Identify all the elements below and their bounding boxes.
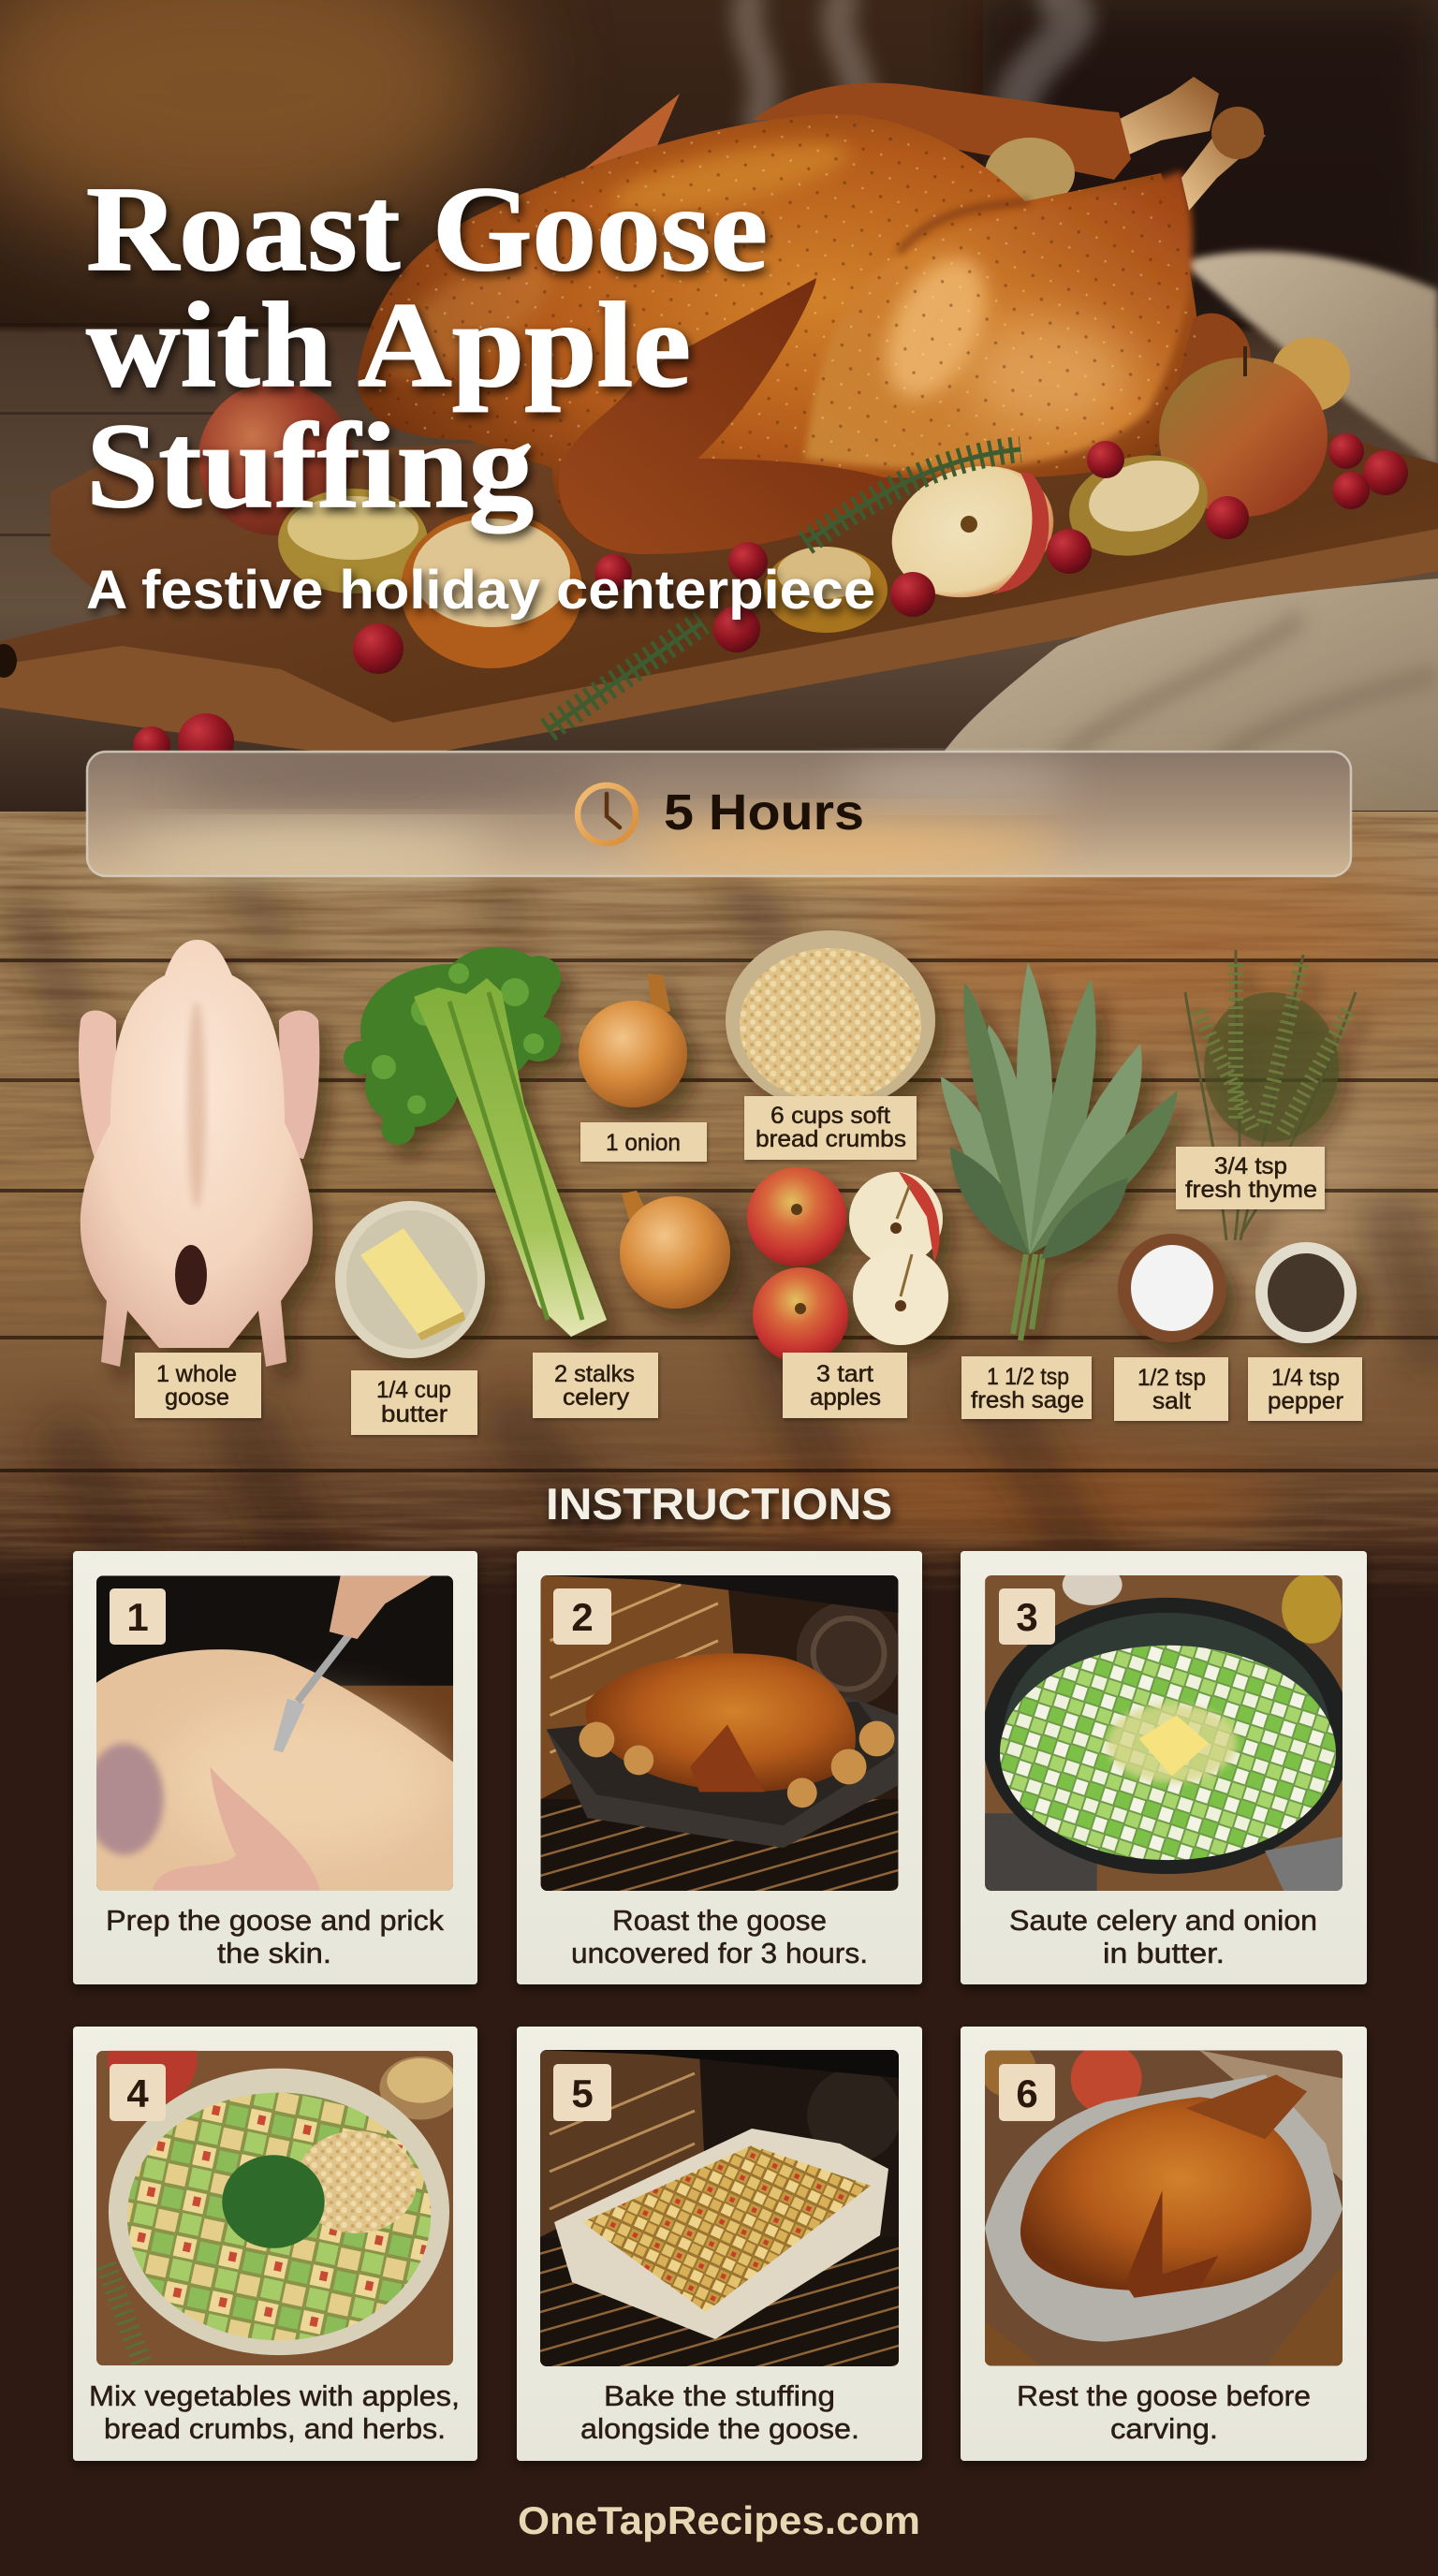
label: apples: [783, 1353, 907, 1418]
ingredient: onion bottom: [620, 1191, 730, 1309]
step 5 number: [553, 2064, 611, 2121]
ingredient: bread crumbs: [726, 930, 935, 1110]
ingredient: celery: [344, 947, 607, 1337]
title: Roast Goose: [86, 162, 768, 297]
goose back leg: [753, 77, 1219, 180]
label: sage: 1 1/2 tsp: [987, 1364, 1069, 1390]
step 1 card: [73, 1551, 477, 1984]
label: pepper: [1248, 1357, 1362, 1421]
step 2 text: [571, 1904, 868, 1969]
step 4 photo: [96, 2050, 453, 2366]
step 1 text: Prep the goose and prick: [106, 1904, 445, 1937]
title: with Apple: [86, 278, 691, 413]
step 2 number: 2: [571, 1595, 594, 1639]
label: celery: [533, 1353, 658, 1418]
background: dark lower section: [0, 1599, 1438, 2576]
cloth: upper right: [1181, 251, 1438, 468]
label: celery: 2 stalks: [554, 1361, 635, 1387]
label: onion: 1 onion: [606, 1130, 681, 1156]
step 3 text: in butter.: [1103, 1937, 1225, 1969]
ingredient: sage: [941, 962, 1178, 1340]
step 6 card: [961, 2027, 1367, 2461]
ingredient: pepper: [1255, 1242, 1357, 1343]
goose body: [356, 94, 1266, 562]
label: apples: 3 tart: [816, 1361, 873, 1387]
subtitle: A festive holiday centerpiece: [86, 560, 875, 621]
step 6 number: [999, 2064, 1055, 2121]
step 4 text: bread crumbs, and herbs.: [104, 2412, 446, 2445]
ingredient: salt: [1118, 1234, 1226, 1342]
step 1 text: the skin.: [217, 1937, 331, 1969]
rosemary sprigs: [548, 449, 1020, 730]
step 2 number: [553, 1588, 611, 1645]
step 4 text: [89, 2379, 460, 2445]
step 2 text: Roast the goose: [612, 1904, 827, 1937]
step 5 photo: [540, 2050, 899, 2366]
ingredient: onion top: [579, 973, 687, 1107]
step 2 text: uncovered for 3 hours.: [571, 1937, 868, 1969]
ingredient: butter: [335, 1201, 485, 1358]
label: salt: [1114, 1357, 1228, 1421]
step 1 text: [106, 1904, 445, 1969]
step 3 photo: [985, 1575, 1343, 1891]
goose wing: [559, 278, 899, 554]
steam: [747, 0, 1073, 122]
step 4 number: [110, 2064, 166, 2121]
background: hero scene: [0, 0, 1438, 814]
step 3 text: Saute celery and onion: [1009, 1904, 1317, 1937]
label: bread crumbs: [744, 1096, 917, 1160]
step 6 number: 6: [1016, 2071, 1038, 2115]
step 1 photo: [96, 1575, 453, 1891]
step 5 text: Bake the stuffing: [604, 2379, 835, 2412]
label: celery: celery: [563, 1384, 630, 1411]
label: salt: 1/2 tsp: [1137, 1365, 1206, 1391]
label: 1 whole goose: [135, 1353, 261, 1418]
step 3 number: 3: [1016, 1595, 1038, 1639]
step 1 number: 1: [126, 1595, 149, 1639]
label: salt: salt: [1152, 1388, 1191, 1414]
step 5 number: 5: [571, 2071, 594, 2115]
ingredient: apples: [747, 1167, 948, 1363]
step 4 number: 4: [126, 2071, 149, 2115]
time text: 5 Hours: [664, 784, 864, 841]
stuffing peeking out: [985, 138, 1075, 209]
title: [86, 162, 768, 534]
step 3 text: [1009, 1904, 1317, 1969]
label: thyme: [1176, 1147, 1325, 1209]
label: apples: apples: [810, 1384, 881, 1411]
step 5 card: [517, 2027, 922, 2461]
step 6 photo: [985, 2050, 1343, 2366]
ingredient: goose: [79, 940, 319, 1367]
step 4 text: Mix vegetables with apples,: [89, 2379, 460, 2412]
step 5 text: alongside the goose.: [580, 2412, 859, 2445]
time bar: [87, 752, 1351, 876]
apples behind and beside goose: [198, 337, 1350, 535]
cloth: lower right: [913, 578, 1438, 811]
background: wood table: [0, 812, 1438, 1601]
label: sage: fresh sage: [971, 1387, 1084, 1413]
step 5 text: [580, 2379, 859, 2445]
step 6 text: carving.: [1110, 2412, 1218, 2445]
label: 1 whole goose: 1 whole: [156, 1361, 237, 1387]
label: bread crumbs: 6 cups soft: [770, 1103, 890, 1129]
cutting board: [0, 402, 1438, 760]
step 6 text: [1017, 2379, 1311, 2445]
label: thyme: 3/4 tsp: [1214, 1153, 1287, 1179]
step 2 card: [517, 1551, 922, 1984]
step 4 card: [73, 2015, 477, 2461]
label: sage: [961, 1356, 1092, 1419]
label: butter: butter: [381, 1401, 448, 1427]
step 6 text: Rest the goose before: [1017, 2379, 1311, 2412]
step 1 number: [110, 1588, 166, 1645]
ingredient: thyme: [1185, 950, 1356, 1240]
icon: clock: [578, 785, 636, 843]
label: pepper: pepper: [1268, 1388, 1343, 1414]
step 3 number: [999, 1588, 1055, 1645]
label: bread crumbs: bread crumbs: [756, 1126, 906, 1152]
label: butter: [351, 1370, 477, 1435]
label: 1 whole goose: goose: [165, 1384, 229, 1411]
cranberries: [133, 433, 1408, 769]
label: pepper: 1/4 tsp: [1271, 1365, 1340, 1391]
footer: site name: OneTapRecipes.com: [518, 2498, 920, 2542]
heading: instructions: INSTRUCTIONS: [546, 1479, 892, 1529]
label: thyme: fresh thyme: [1185, 1177, 1317, 1203]
label: onion: [580, 1122, 707, 1162]
title: Stuffing: [86, 399, 534, 534]
step 2 photo: [541, 1575, 899, 1891]
apple halves: [278, 441, 1218, 668]
step 3 card: [961, 1551, 1367, 1984]
label: butter: 1/4 cup: [376, 1377, 451, 1403]
